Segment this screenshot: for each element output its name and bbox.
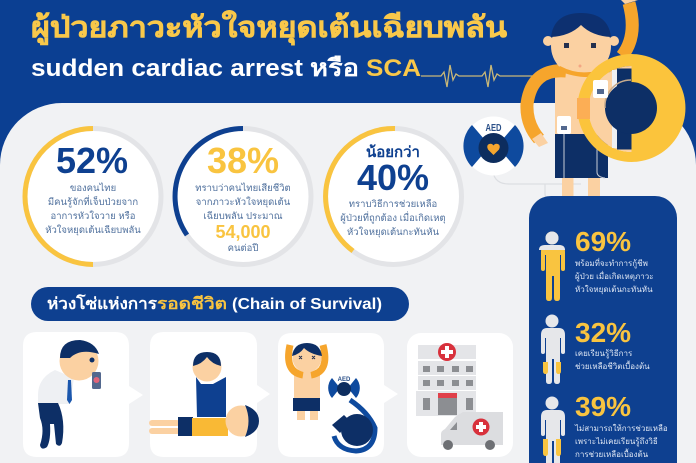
chain of survival heading: (Chain of Survival)	[232, 296, 382, 313]
ambulance	[441, 412, 503, 445]
stat 69%: หัวใจหยุดเต้นกะทันหัน	[575, 285, 653, 294]
card 3: AED use: AED	[338, 377, 351, 383]
raised arm	[622, 3, 632, 56]
stat 32%: ช่วยเหลือชีวิตเบื้องต้น	[575, 360, 650, 371]
stat circle: 40%: ทราบวิธีการช่วยเหลือ	[349, 198, 437, 210]
AED device	[463, 116, 524, 176]
illustration: patient with rescuer	[527, 0, 685, 208]
left arm	[527, 71, 566, 139]
electrode pad	[557, 116, 571, 134]
stat 39%: เพราะไม่เคยเรียนรู้ถึงวิธี	[575, 437, 658, 447]
stat circle: 40%: 40%	[357, 157, 429, 198]
stat circle: 52%: มีคนรู้จักที่เจ็บป่วยจาก	[48, 195, 138, 208]
head	[292, 344, 322, 372]
legs	[297, 405, 305, 420]
stat 39%	[541, 391, 668, 463]
chain of survival heading	[31, 287, 409, 321]
rescuer ring	[577, 54, 685, 162]
stat circle: 38%: เฉียบพลัน ประมาณ	[203, 210, 283, 222]
stat circle: 52%: 52%	[56, 140, 128, 181]
card 1: call for help	[23, 332, 143, 457]
head	[60, 342, 98, 380]
stat 39%: 39%	[575, 391, 631, 422]
stat circle: 38%	[175, 128, 311, 264]
stat circle: 52%	[25, 128, 161, 264]
stat circle: 40%: น้อยกว่า	[366, 144, 420, 161]
stat circle: 38%: 54,000	[215, 222, 271, 242]
ECG line	[421, 65, 545, 87]
title	[31, 10, 507, 82]
phone	[92, 372, 101, 389]
electrode pad upper	[593, 80, 608, 98]
stat circle: 40%	[326, 128, 462, 264]
stat 32%: เคยเรียนรู้วิธีการ	[575, 349, 633, 359]
stat circle: 38%: จากภาวะหัวใจหยุดเต้น	[196, 196, 291, 208]
stat circle: 38%: 38%	[207, 140, 279, 181]
stat 32%	[541, 314, 650, 384]
patient	[149, 420, 180, 426]
stat 32%: 32%	[575, 317, 631, 348]
torso and shorts	[294, 372, 320, 400]
stat circle: 40%: หัวใจหยุดเต้นกะทันหัน	[347, 226, 440, 238]
title: หรือ	[310, 55, 359, 82]
title: SCA	[366, 55, 421, 82]
wires from AED to patient	[493, 172, 581, 204]
rescuer from above	[334, 400, 375, 451]
shorts	[555, 134, 608, 178]
AED small	[329, 373, 359, 403]
stat 69%	[539, 226, 654, 301]
AED device: AED	[486, 123, 502, 134]
stat 69%: พร้อมที่จะทำการกู้ชีพ	[575, 257, 648, 269]
arms	[289, 345, 325, 375]
stat circle: 52%: หัวใจหยุดเต้นเฉียบพลัน	[45, 224, 141, 236]
stat circle: 38%: คนต่อปี	[228, 242, 258, 254]
shirt	[38, 370, 74, 404]
stat 69%: ผู้ป่วย เมื่อเกิดเหตุภาวะ	[575, 270, 654, 282]
chain of survival heading: ห่วงโซ่แห่งการ	[47, 293, 157, 313]
stat circle: 38%: ทราบว่าคนไทยเสียชีวิต	[195, 182, 291, 194]
light content panel	[0, 103, 696, 463]
stat 39%: การช่วยเหลือเบื้องต้น	[575, 448, 649, 459]
card 3: AED use	[278, 333, 398, 457]
stat 69%: 69%	[575, 226, 631, 257]
stat circle: 52%: อาการหัวใจวาย หรือ	[51, 210, 135, 222]
collar	[556, 66, 606, 77]
card 4: hospital and ambulance	[407, 333, 513, 457]
statistics panel	[529, 196, 677, 463]
tie	[67, 380, 72, 404]
chain of survival heading: รอดชีวิต	[157, 294, 227, 313]
head	[543, 13, 619, 76]
trousers	[38, 403, 63, 449]
stat circle: 40%: ผู้ป่วยที่ถูกต้อง เมื่อเกิดเหตุ	[340, 211, 446, 224]
title: sudden cardiac arrest	[31, 55, 303, 82]
card 2: CPR	[149, 332, 270, 457]
legs	[562, 176, 600, 208]
rescuer	[196, 377, 226, 417]
stat circle: 52%: ของคนไทย	[70, 182, 116, 194]
stat 39%: ไม่สามารถให้การช่วยเหลือ	[574, 424, 668, 433]
hospital bands	[416, 345, 476, 416]
title: ผู้ป่วยภาวะหัวใจหยุดเต้นเฉียบพลัน	[31, 10, 507, 45]
torso	[555, 72, 609, 138]
